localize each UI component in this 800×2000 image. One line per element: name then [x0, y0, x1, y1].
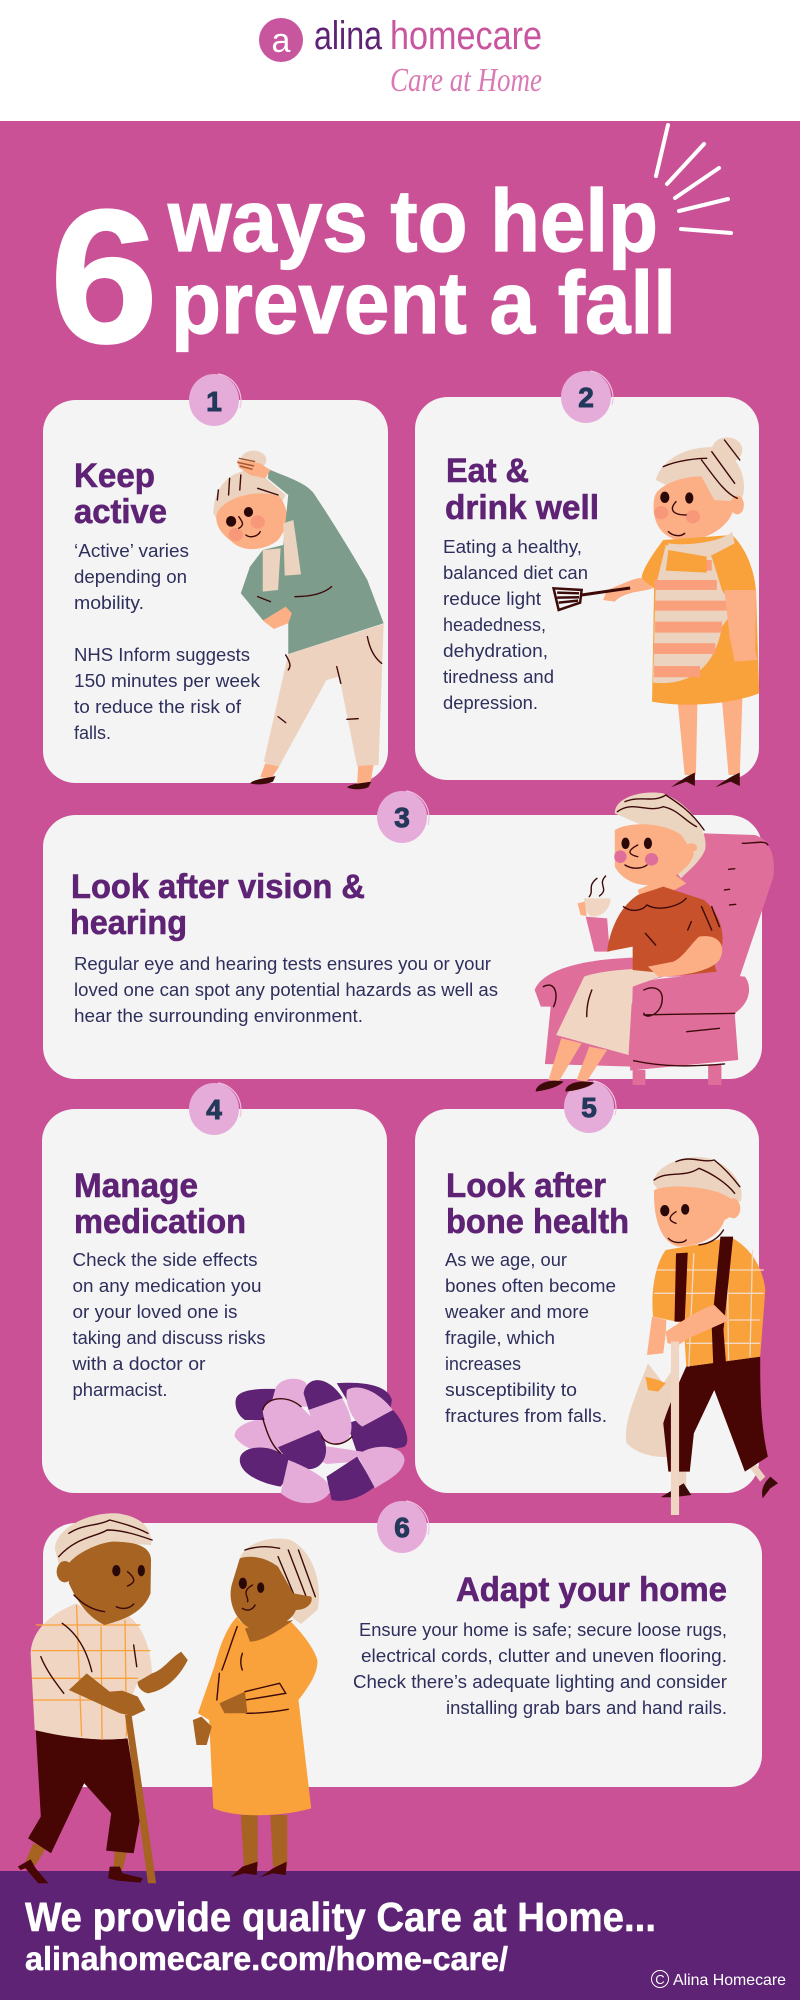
- body text: or your loved one is: [72, 1302, 238, 1322]
- body text: [74, 954, 498, 1026]
- body text: susceptibility to: [445, 1380, 577, 1400]
- title: [50, 171, 676, 383]
- body text: [74, 541, 261, 743]
- body text: depression.: [443, 693, 538, 713]
- panel 1: keep active: [43, 374, 388, 783]
- body text: Check the side effects: [72, 1250, 258, 1270]
- body text: dehydration,: [443, 641, 548, 661]
- heading: Adapt your home: [456, 1571, 727, 1609]
- heading: Eat &: [446, 452, 529, 490]
- body text: As we age, our: [445, 1250, 567, 1270]
- body text: with a doctor or: [71, 1354, 206, 1374]
- heading: active: [74, 493, 167, 531]
- body text: 150 minutes per week: [74, 671, 261, 691]
- body text: bones often become: [445, 1276, 616, 1296]
- illustration: woman stretching: [213, 451, 384, 789]
- body text: depending on: [74, 567, 187, 587]
- body text: tiredness and: [443, 667, 554, 687]
- logo: [259, 14, 542, 99]
- illustration: woman with spatula: [554, 437, 759, 787]
- body text: mobility.: [74, 593, 144, 613]
- body text: [71, 1250, 266, 1400]
- illustration: woman in armchair with cup: [535, 792, 774, 1092]
- body text: NHS Inform suggests: [74, 645, 250, 665]
- logo wordmark homecare: homecare: [390, 14, 542, 58]
- heading: medication: [74, 1203, 246, 1241]
- heading: Manage: [74, 1167, 198, 1205]
- number badge 4: 4: [206, 1094, 222, 1125]
- body text: fragile, which: [445, 1328, 555, 1348]
- illustration: elderly woman in orange dress: [193, 1539, 319, 1877]
- illustration: elderly man talking: [18, 1513, 188, 1883]
- body text: taking and discuss risks: [72, 1328, 266, 1348]
- heading: [446, 1167, 629, 1241]
- body text: electrical cords, clutter and uneven flooring.: [361, 1646, 727, 1666]
- body text: balanced diet can: [443, 563, 588, 583]
- body text: [443, 537, 588, 713]
- illustration: pills: [235, 1379, 407, 1503]
- number badge 1: 1: [206, 386, 222, 417]
- big number 6: 6: [50, 171, 158, 383]
- panel 5: bone health: [415, 1081, 759, 1493]
- body text: falls.: [74, 723, 111, 743]
- number badge 2: 2: [578, 382, 594, 413]
- body text: reduce light: [443, 589, 541, 609]
- panel 4: manage medication: [42, 1083, 387, 1493]
- title line 2: prevent a fall: [171, 253, 676, 352]
- heading: drink well: [445, 489, 599, 527]
- number badge 5: [564, 1081, 616, 1133]
- title line 1: ways to help: [167, 171, 658, 270]
- icon: logo circle: a: [272, 22, 291, 60]
- heading: hearing: [70, 904, 187, 942]
- panel 6: adapt your home: [43, 1501, 762, 1787]
- logo wordmark alina: alina: [314, 14, 383, 58]
- number badge 1: [189, 374, 241, 426]
- icon: burst rays: [656, 125, 731, 233]
- body text: to reduce the risk of: [74, 697, 242, 717]
- heading: [74, 1167, 246, 1241]
- body text: [353, 1620, 727, 1718]
- number badge 5: 5: [581, 1092, 597, 1123]
- heading: Look after vision &: [71, 868, 365, 906]
- body text: pharmacist.: [72, 1380, 168, 1400]
- number badge 6: 6: [394, 1512, 410, 1543]
- panel 3: vision and hearing: [43, 791, 762, 1079]
- body text: increases: [445, 1354, 521, 1374]
- number badge 4: [189, 1083, 241, 1135]
- body text: Ensure your home is safe; secure loose rugs,: [359, 1620, 727, 1640]
- heading: [445, 452, 599, 527]
- body text: Check there’s adequate lighting and consider: [353, 1672, 727, 1692]
- number badge 6: [377, 1501, 429, 1553]
- body text: headedness,: [443, 615, 546, 635]
- footer url: alinahomecare.com/home-care/: [25, 1940, 508, 1977]
- body text: Eating a healthy,: [443, 537, 582, 557]
- body text: hear the surrounding environment.: [74, 1006, 363, 1026]
- footer headline: We provide quality Care at Home...: [25, 1894, 656, 1940]
- body text: loved one can spot any potential hazards as well as: [74, 980, 498, 1000]
- body text: ‘Active’ varies: [74, 541, 189, 561]
- illustration: man with cane and bag: [626, 1157, 778, 1515]
- heading: bone health: [446, 1203, 629, 1241]
- footer band: [0, 1871, 800, 2000]
- body text: weaker and more: [444, 1302, 589, 1322]
- body text: on any medication you: [72, 1276, 262, 1296]
- logo tagline: Care at Home: [390, 62, 542, 99]
- body text: installing grab bars and hand rails.: [446, 1698, 727, 1718]
- number badge 2: [561, 371, 613, 423]
- heading: [74, 457, 167, 531]
- number badge 3: 3: [394, 802, 410, 833]
- heading: [70, 868, 365, 942]
- icon: logo circle: [259, 18, 303, 62]
- body text: fractures from falls.: [445, 1406, 607, 1426]
- heading: Look after: [446, 1167, 606, 1205]
- panel 2: eat and drink well: [415, 371, 759, 780]
- copyright: Alina Homecare: [673, 1972, 786, 1989]
- copyright: C: [655, 1972, 665, 1987]
- body text: Regular eye and hearing tests ensures you or your: [74, 954, 491, 974]
- body text: [444, 1250, 616, 1426]
- heading: Keep: [74, 457, 155, 495]
- number badge 3: [377, 791, 429, 843]
